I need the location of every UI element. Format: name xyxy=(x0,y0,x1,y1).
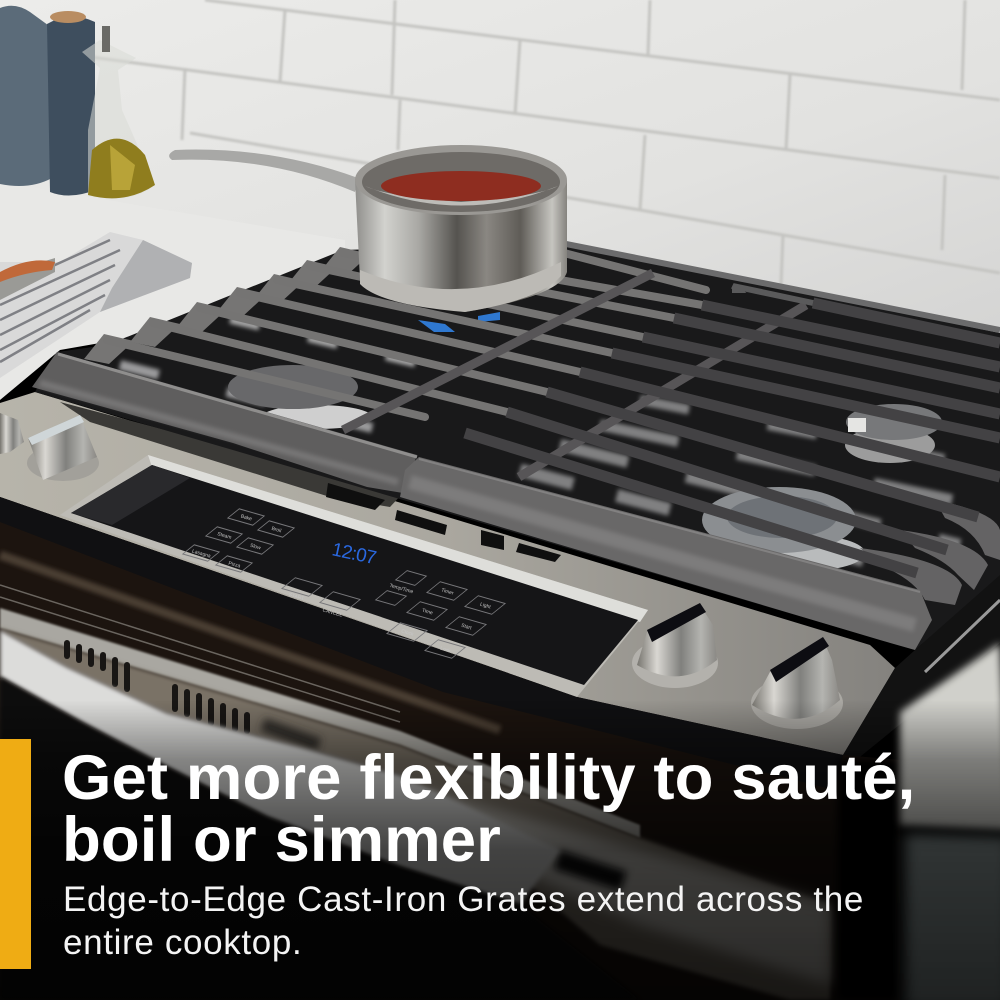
door silver rim xyxy=(0,608,640,838)
knob: far left xyxy=(0,413,24,454)
subheading xyxy=(63,880,864,962)
door panel with vents xyxy=(0,628,830,1000)
panel labels: Light xyxy=(479,602,492,611)
back rim of cooktop xyxy=(561,243,1000,330)
panel labels: Pizza xyxy=(228,560,241,570)
blurred vents lower xyxy=(260,718,627,891)
pan handle xyxy=(169,150,358,192)
heading: Get more flexibility to sauté, xyxy=(62,743,915,813)
stainless control strip xyxy=(0,392,895,755)
panel labels: Timer xyxy=(440,587,454,597)
panel labels: Slow xyxy=(249,543,262,552)
knob: far right xyxy=(751,637,843,729)
panel labels: Broil xyxy=(271,526,282,534)
cooktop base xyxy=(35,243,1000,650)
burner: front right xyxy=(702,487,865,571)
subheading: entire cooktop. xyxy=(63,923,302,962)
panel buttons xyxy=(183,509,505,658)
panel labels: CANCEL xyxy=(322,607,343,619)
long grate bars: left grate xyxy=(107,253,706,417)
clock display: 12:07 xyxy=(330,539,378,569)
burner box cutouts xyxy=(326,483,561,562)
knob: center right xyxy=(632,603,718,688)
subheading: Edge-to-Edge Cast-Iron Grates extend across the xyxy=(63,880,864,919)
heading: boil or simmer xyxy=(62,805,501,875)
panel labels: Bake xyxy=(240,514,253,523)
reflections in cooktop xyxy=(120,320,1000,570)
cabinet: lower right xyxy=(905,835,1000,1000)
door gloss lines xyxy=(0,555,500,730)
panel labels: Lock xyxy=(439,646,452,655)
black bottom left xyxy=(0,677,640,1000)
knob: left xyxy=(27,415,99,481)
panel labels: Time xyxy=(421,608,434,616)
saucepan xyxy=(169,145,567,312)
control panel xyxy=(60,455,648,697)
burner: blue flame under pot xyxy=(418,312,500,332)
panel labels: Clock xyxy=(400,628,415,638)
heading xyxy=(62,743,915,875)
cast-iron grates xyxy=(84,247,1000,605)
white band under door xyxy=(0,630,560,905)
door: dark glossy band xyxy=(0,497,900,1000)
panel labels: Temp/Time xyxy=(389,583,414,595)
counter: lower right xyxy=(900,643,1000,830)
dish towel xyxy=(0,232,192,378)
dark pillar xyxy=(838,760,900,1000)
vent slots xyxy=(64,640,250,734)
panel labels: Lasagna xyxy=(191,549,212,560)
front grate bar: left xyxy=(32,352,417,493)
tiled wall xyxy=(0,0,1000,340)
grate tabs at back left xyxy=(84,247,370,364)
panel labels: START xyxy=(288,592,305,602)
burner: back right xyxy=(845,404,942,463)
canisters xyxy=(0,6,95,196)
grate shadow on strip xyxy=(60,402,403,507)
black edge of range xyxy=(843,575,1000,765)
panel labels xyxy=(191,514,492,655)
panel labels: Steam xyxy=(217,531,232,541)
burner: left xyxy=(228,365,372,429)
long grate bars: right grate xyxy=(465,303,1000,573)
black band under panel xyxy=(0,497,843,790)
accent bar xyxy=(0,739,31,969)
panel labels: Start xyxy=(460,623,473,632)
grate tabs at front right xyxy=(860,500,1000,605)
front grate bar: right xyxy=(400,457,932,650)
oil carafe xyxy=(82,26,155,198)
door panel lower blurred xyxy=(420,790,830,985)
cross bars xyxy=(343,273,806,477)
dark gradient overlay xyxy=(0,700,1000,1000)
counter top xyxy=(0,182,345,400)
